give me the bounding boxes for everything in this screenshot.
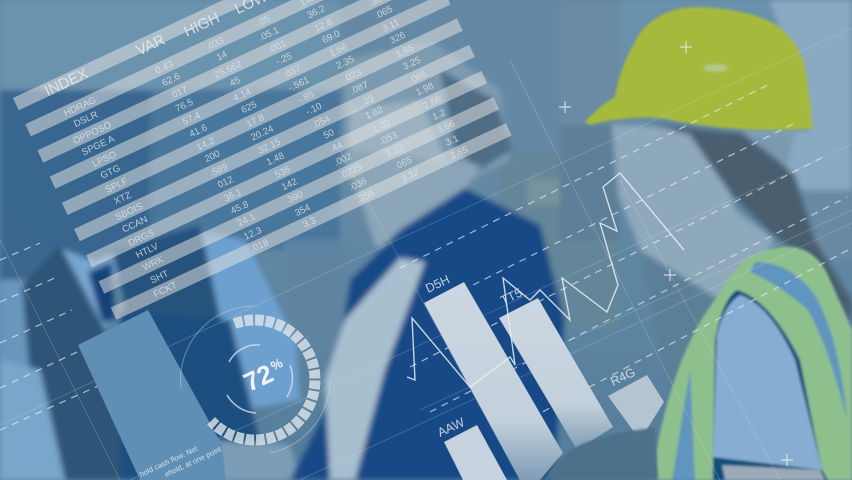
- fifth column: 1.66: [328, 42, 349, 59]
- high column: 536: [273, 164, 292, 181]
- sixth column: 1.2: [431, 107, 447, 123]
- low column: .0225: [338, 162, 364, 182]
- fifth column: 69.0: [320, 28, 342, 46]
- bar labels: [423, 272, 638, 440]
- index column: SHT: [149, 268, 171, 286]
- high column: 32.15: [256, 137, 283, 157]
- high column: 20.24: [249, 123, 275, 143]
- sixth column: [367, 0, 470, 166]
- fifth column: 1.62: [364, 104, 385, 122]
- hi-vis safety vest: [655, 247, 852, 480]
- high column: 14: [215, 49, 229, 64]
- var column: 57.4: [181, 110, 202, 128]
- text block: laptop caption: hold cash flow. Net: [138, 444, 200, 479]
- fifth column: 12.8: [313, 17, 334, 34]
- var column: 41.6: [188, 122, 209, 140]
- sixth column: 1.98: [414, 81, 436, 98]
- high column: 1.48: [265, 150, 286, 168]
- sixth column: 2.65: [448, 144, 470, 162]
- high column: 4.14: [232, 86, 253, 104]
- index column: HDRAG: [62, 95, 98, 119]
- gauge value: 72: [239, 358, 278, 398]
- high column: 354: [293, 202, 312, 219]
- fifth column: .33: [359, 93, 376, 109]
- low column: .036: [347, 176, 369, 194]
- low column: [251, 5, 376, 214]
- fifth column: .087: [349, 79, 370, 97]
- var column: 012: [216, 174, 235, 191]
- index column: SPLF: [104, 176, 130, 196]
- high column: 625: [240, 99, 259, 116]
- var column: .589: [208, 161, 230, 179]
- table header: VAR: [134, 31, 168, 59]
- bar labels: D5H: [423, 272, 452, 296]
- bar AAW: [444, 425, 507, 480]
- low column: .256: [355, 188, 376, 206]
- gauge inner arcs: [227, 345, 292, 413]
- bar D5H: [424, 282, 563, 480]
- bar R4G: [608, 375, 664, 440]
- bar chart: [423, 272, 664, 480]
- line chart: [407, 173, 684, 387]
- icon: plus markers: [559, 41, 793, 466]
- var column: 24.1: [236, 211, 257, 229]
- low column: -.25: [274, 51, 294, 68]
- low column: -.05: [253, 14, 272, 30]
- sixth column: .065: [373, 4, 394, 22]
- index column: OPPOSO: [71, 120, 113, 147]
- fifth column: .023: [342, 67, 363, 85]
- var column: 14.2: [195, 136, 216, 153]
- central woman: [345, 40, 510, 240]
- foreground arm shade: [545, 428, 658, 480]
- index column: FCKT: [152, 280, 179, 300]
- table header: HIGH: [181, 9, 222, 40]
- sixth column: 326: [388, 30, 407, 47]
- var column: .018: [249, 237, 270, 255]
- low column: .001: [267, 38, 288, 56]
- index column: DRGS: [127, 228, 156, 249]
- icon: yellow hard hat: [585, 7, 818, 130]
- low column: .05.1: [257, 25, 281, 44]
- dashed trend lines: [0, 83, 852, 436]
- var column: [154, 54, 270, 260]
- fifth column: .053: [378, 130, 399, 148]
- fifth column: 1.03: [371, 118, 392, 135]
- fifth column: 36.2: [305, 3, 327, 21]
- text block: laptop caption: ehold, at one point: [163, 444, 224, 479]
- gauge value: [239, 352, 291, 398]
- var column: 0.43: [154, 59, 175, 77]
- low column: .44: [328, 140, 345, 155]
- sixth column: 2.66: [422, 94, 443, 112]
- fifth column: [299, 0, 421, 192]
- high column: 390: [286, 189, 305, 206]
- var column: 45.8: [229, 199, 250, 217]
- fifth column: 2.35: [335, 54, 356, 72]
- index column: DSLR: [72, 109, 100, 130]
- table header: [42, 0, 271, 105]
- panel: rotated stock table: [13, 0, 512, 320]
- high column: 142: [280, 176, 299, 193]
- var column: 36.1: [222, 187, 244, 205]
- man: [0, 105, 150, 262]
- gauge segmented ring: [211, 320, 315, 440]
- sixth column: 3.11: [381, 17, 401, 35]
- sixth column: 1.65: [394, 43, 416, 60]
- low column: 50: [322, 127, 336, 142]
- gauge thin outer arcs: [181, 306, 330, 453]
- high column: 17.8: [245, 112, 266, 130]
- index column: XTZ: [112, 190, 133, 207]
- index column: [59, 93, 186, 304]
- high column: .033: [204, 35, 226, 53]
- var column: 76.5: [174, 97, 195, 115]
- index column: WRK: [141, 254, 166, 273]
- low column: -.85: [297, 89, 316, 106]
- gauge value: %: [268, 355, 285, 374]
- low column: -.10: [304, 101, 324, 118]
- fifth column: .065: [393, 155, 414, 173]
- index column: GTG: [99, 163, 122, 182]
- table strips: [13, 0, 512, 320]
- var column: 12.3: [242, 225, 264, 243]
- index column: LPSO: [91, 149, 118, 170]
- var column: .017: [168, 84, 189, 102]
- woman right: face, hair, shoulder: [612, 125, 775, 345]
- high column: [201, 31, 319, 238]
- low column: .037: [281, 63, 303, 81]
- gauge: 72 percent: [181, 306, 330, 453]
- low column: -.561: [287, 75, 311, 94]
- var column: 62.6: [160, 71, 182, 89]
- index column: CCAN: [121, 214, 150, 235]
- bar labels: R4G: [608, 365, 638, 389]
- sixth column: 3.66: [435, 118, 457, 136]
- index column: SPGE A: [80, 133, 117, 158]
- sixth column: 3.1: [444, 133, 461, 149]
- bar labels: TT5: [498, 286, 524, 308]
- bar TT5: [499, 298, 613, 450]
- bar labels: AAW: [435, 415, 467, 440]
- sixth column: .065: [408, 68, 429, 86]
- low column: .054: [311, 114, 332, 131]
- index column: SBOIS: [114, 201, 145, 223]
- high column: 25.562: [213, 59, 244, 81]
- high column: 45: [228, 75, 242, 89]
- fifth column: 1.23: [384, 142, 406, 160]
- var column: 200: [203, 148, 222, 165]
- fifth column: 3.32: [399, 167, 421, 185]
- table header: INDEX: [42, 65, 91, 100]
- index column: HTLV: [134, 241, 161, 261]
- sixth column: 3.25: [401, 55, 423, 73]
- panel: laptop screen: [78, 310, 226, 480]
- low column: .002: [332, 151, 354, 169]
- high column: 3.3: [301, 215, 318, 231]
